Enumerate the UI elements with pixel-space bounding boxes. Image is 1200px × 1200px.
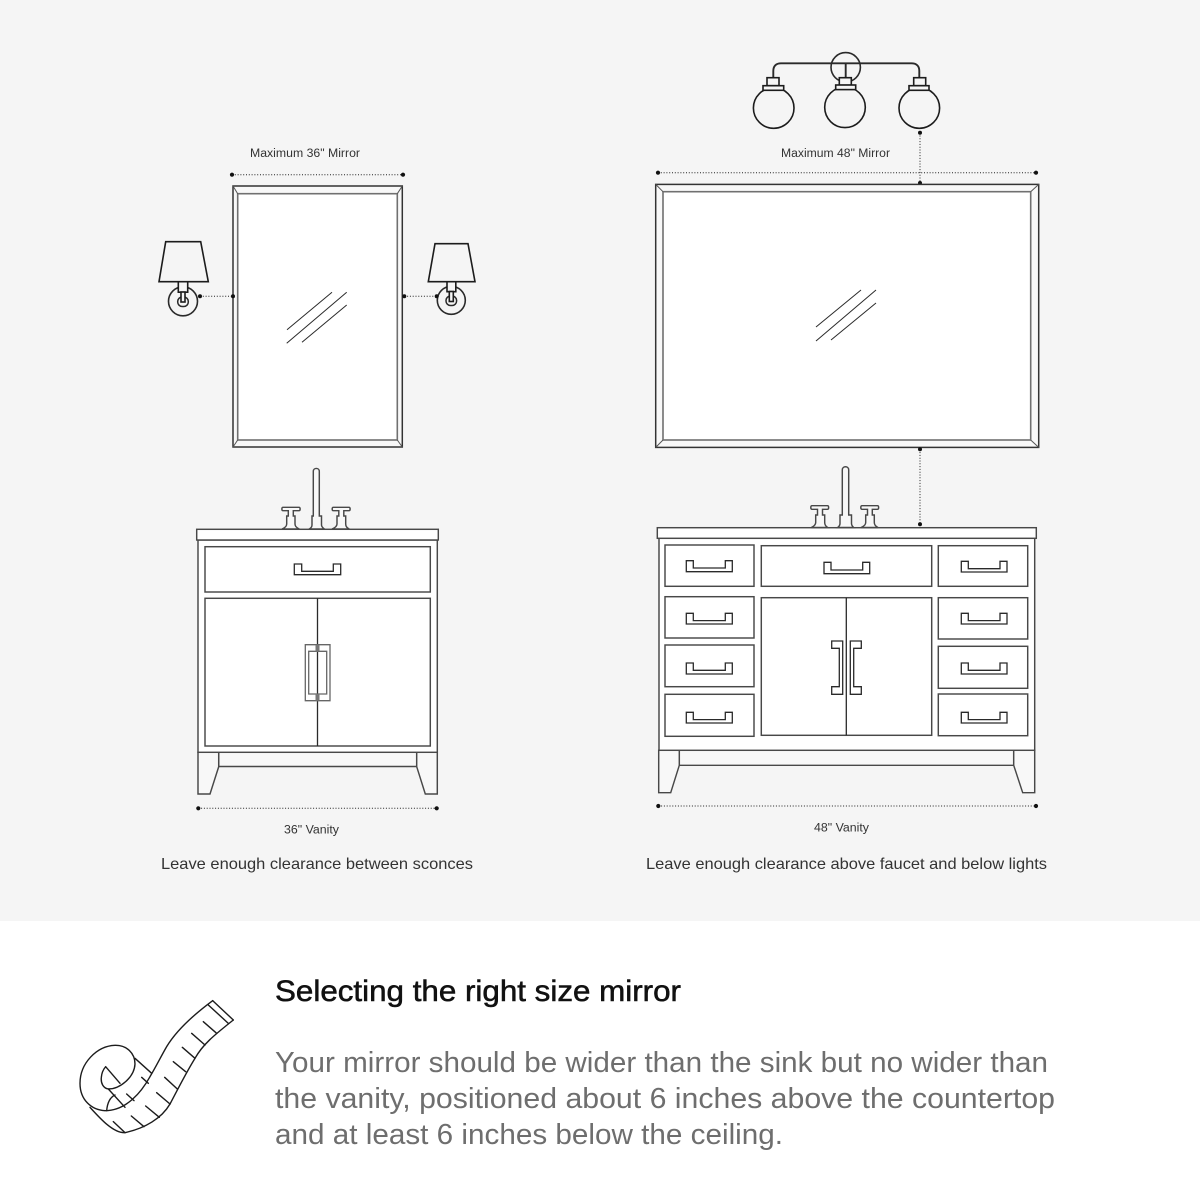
vanity body xyxy=(198,540,437,752)
dimension line: 36 inch vanity width xyxy=(196,806,439,810)
center drawer xyxy=(761,546,932,586)
icon: measuring tape xyxy=(80,1001,233,1133)
caption: right diagram: Leave enough clearance above faucet and below lights xyxy=(646,856,1047,873)
door handles xyxy=(305,645,330,701)
dimension line: clearance above faucet xyxy=(918,447,922,526)
dimension line: clearance below lights xyxy=(918,131,922,185)
body text: and at least 6 inches below the ceiling. xyxy=(275,1119,783,1151)
vanity body xyxy=(659,538,1035,750)
dimension line: 36 inch mirror width xyxy=(230,173,405,177)
vanity legs and rail xyxy=(679,750,1014,765)
icon: left wall sconce xyxy=(159,242,208,316)
label: 48 inch vanity: 48" Vanity xyxy=(814,822,869,834)
icon: right wall sconce xyxy=(428,244,475,314)
dimension line: right sconce clearance xyxy=(402,294,439,298)
mirror: 36 inch xyxy=(233,186,402,447)
dimension line: left sconce clearance xyxy=(198,294,235,298)
body text: the vanity, positioned about 6 inches above the countertop xyxy=(275,1083,1055,1115)
right drawer stack xyxy=(938,546,1028,736)
cabinet doors xyxy=(205,598,430,746)
label: maximum 36 inch mirror: Maximum 36" Mirror xyxy=(250,148,360,160)
dimension line: 48 inch vanity width xyxy=(656,804,1038,808)
icon: three-globe vanity light xyxy=(753,53,940,128)
right faucet handle xyxy=(332,507,350,529)
countertop xyxy=(657,528,1036,538)
right faucet handle xyxy=(861,506,879,528)
faucet xyxy=(838,467,854,528)
left faucet handle xyxy=(282,507,300,529)
heading: Selecting the right size mirror xyxy=(275,975,681,1008)
illustration: 48 inch vanity xyxy=(657,467,1036,793)
caption: left diagram: Leave enough clearance between sconces xyxy=(161,856,473,873)
left drawer stack xyxy=(665,545,754,736)
illustration: 36 inch vanity xyxy=(197,468,438,794)
cabinet doors xyxy=(761,598,932,735)
mirror: 48 inch xyxy=(656,184,1039,447)
left faucet handle xyxy=(811,506,829,528)
body text: Your mirror should be wider than the sink but no wider than xyxy=(275,1047,1048,1079)
body text xyxy=(275,1047,1055,1151)
drawer pull xyxy=(294,564,341,575)
label: maximum 48 inch mirror: Maximum 48" Mirror xyxy=(781,148,890,160)
countertop xyxy=(197,529,438,540)
faucet xyxy=(309,468,324,529)
dimension line: 48 inch mirror width xyxy=(656,171,1038,175)
label: 36 inch vanity: 36" Vanity xyxy=(284,824,339,836)
vanity legs and rail xyxy=(219,752,417,766)
drawer xyxy=(205,547,430,592)
